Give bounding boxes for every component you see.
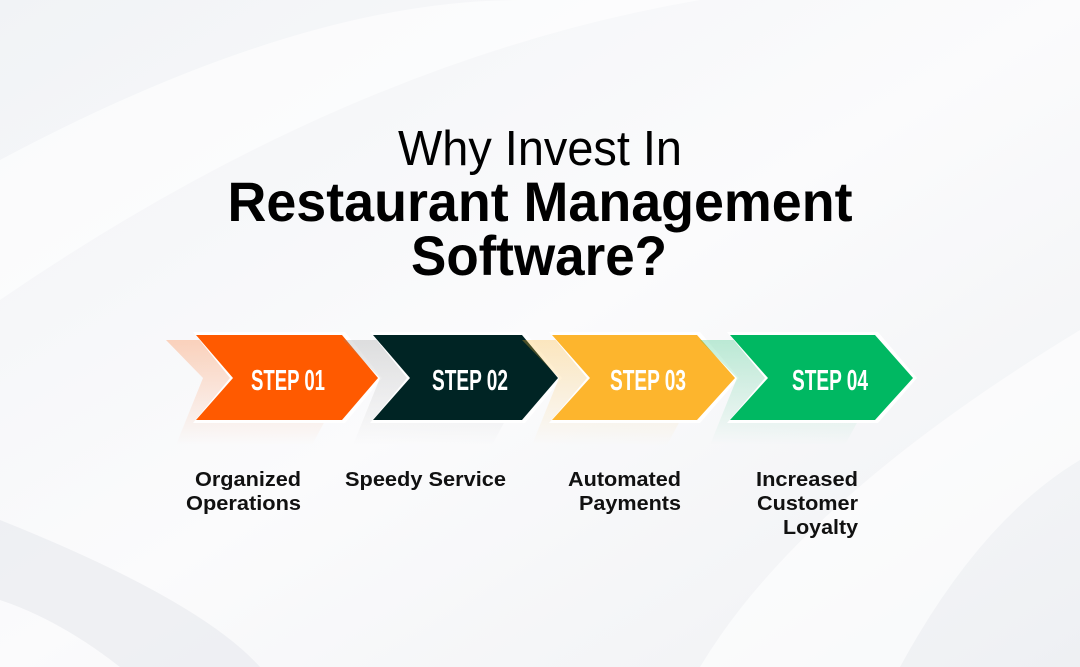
title: Why Invest In — [398, 122, 682, 176]
label: step 4: Loyalty — [783, 517, 859, 539]
step 4 chevron — [700, 332, 917, 445]
title — [228, 122, 852, 287]
label: step 1 — [186, 469, 301, 515]
step 3 chevron — [522, 332, 739, 445]
label: step 3: Payments — [579, 493, 681, 515]
step 2 chevron: STEP 02 — [432, 365, 508, 397]
label: step 4: Customer — [757, 493, 858, 515]
label: step 1: Organized — [195, 469, 301, 491]
label: step 4: Increased — [756, 469, 858, 491]
step 1 chevron — [166, 332, 382, 445]
step 3 chevron: STEP 03 — [610, 365, 686, 397]
step 2 chevron — [343, 332, 562, 445]
title: Software? — [411, 224, 667, 287]
label: step 3: Automated — [568, 469, 681, 491]
label: step 4 — [756, 469, 859, 539]
label: step 1: Operations — [186, 493, 301, 515]
step 4 chevron: STEP 04 — [792, 365, 868, 397]
label: step 3 — [568, 469, 681, 515]
step 1 chevron: STEP 01 — [251, 365, 325, 397]
title: Restaurant Management — [228, 170, 852, 233]
label: step 2: Speedy Service — [345, 469, 506, 491]
